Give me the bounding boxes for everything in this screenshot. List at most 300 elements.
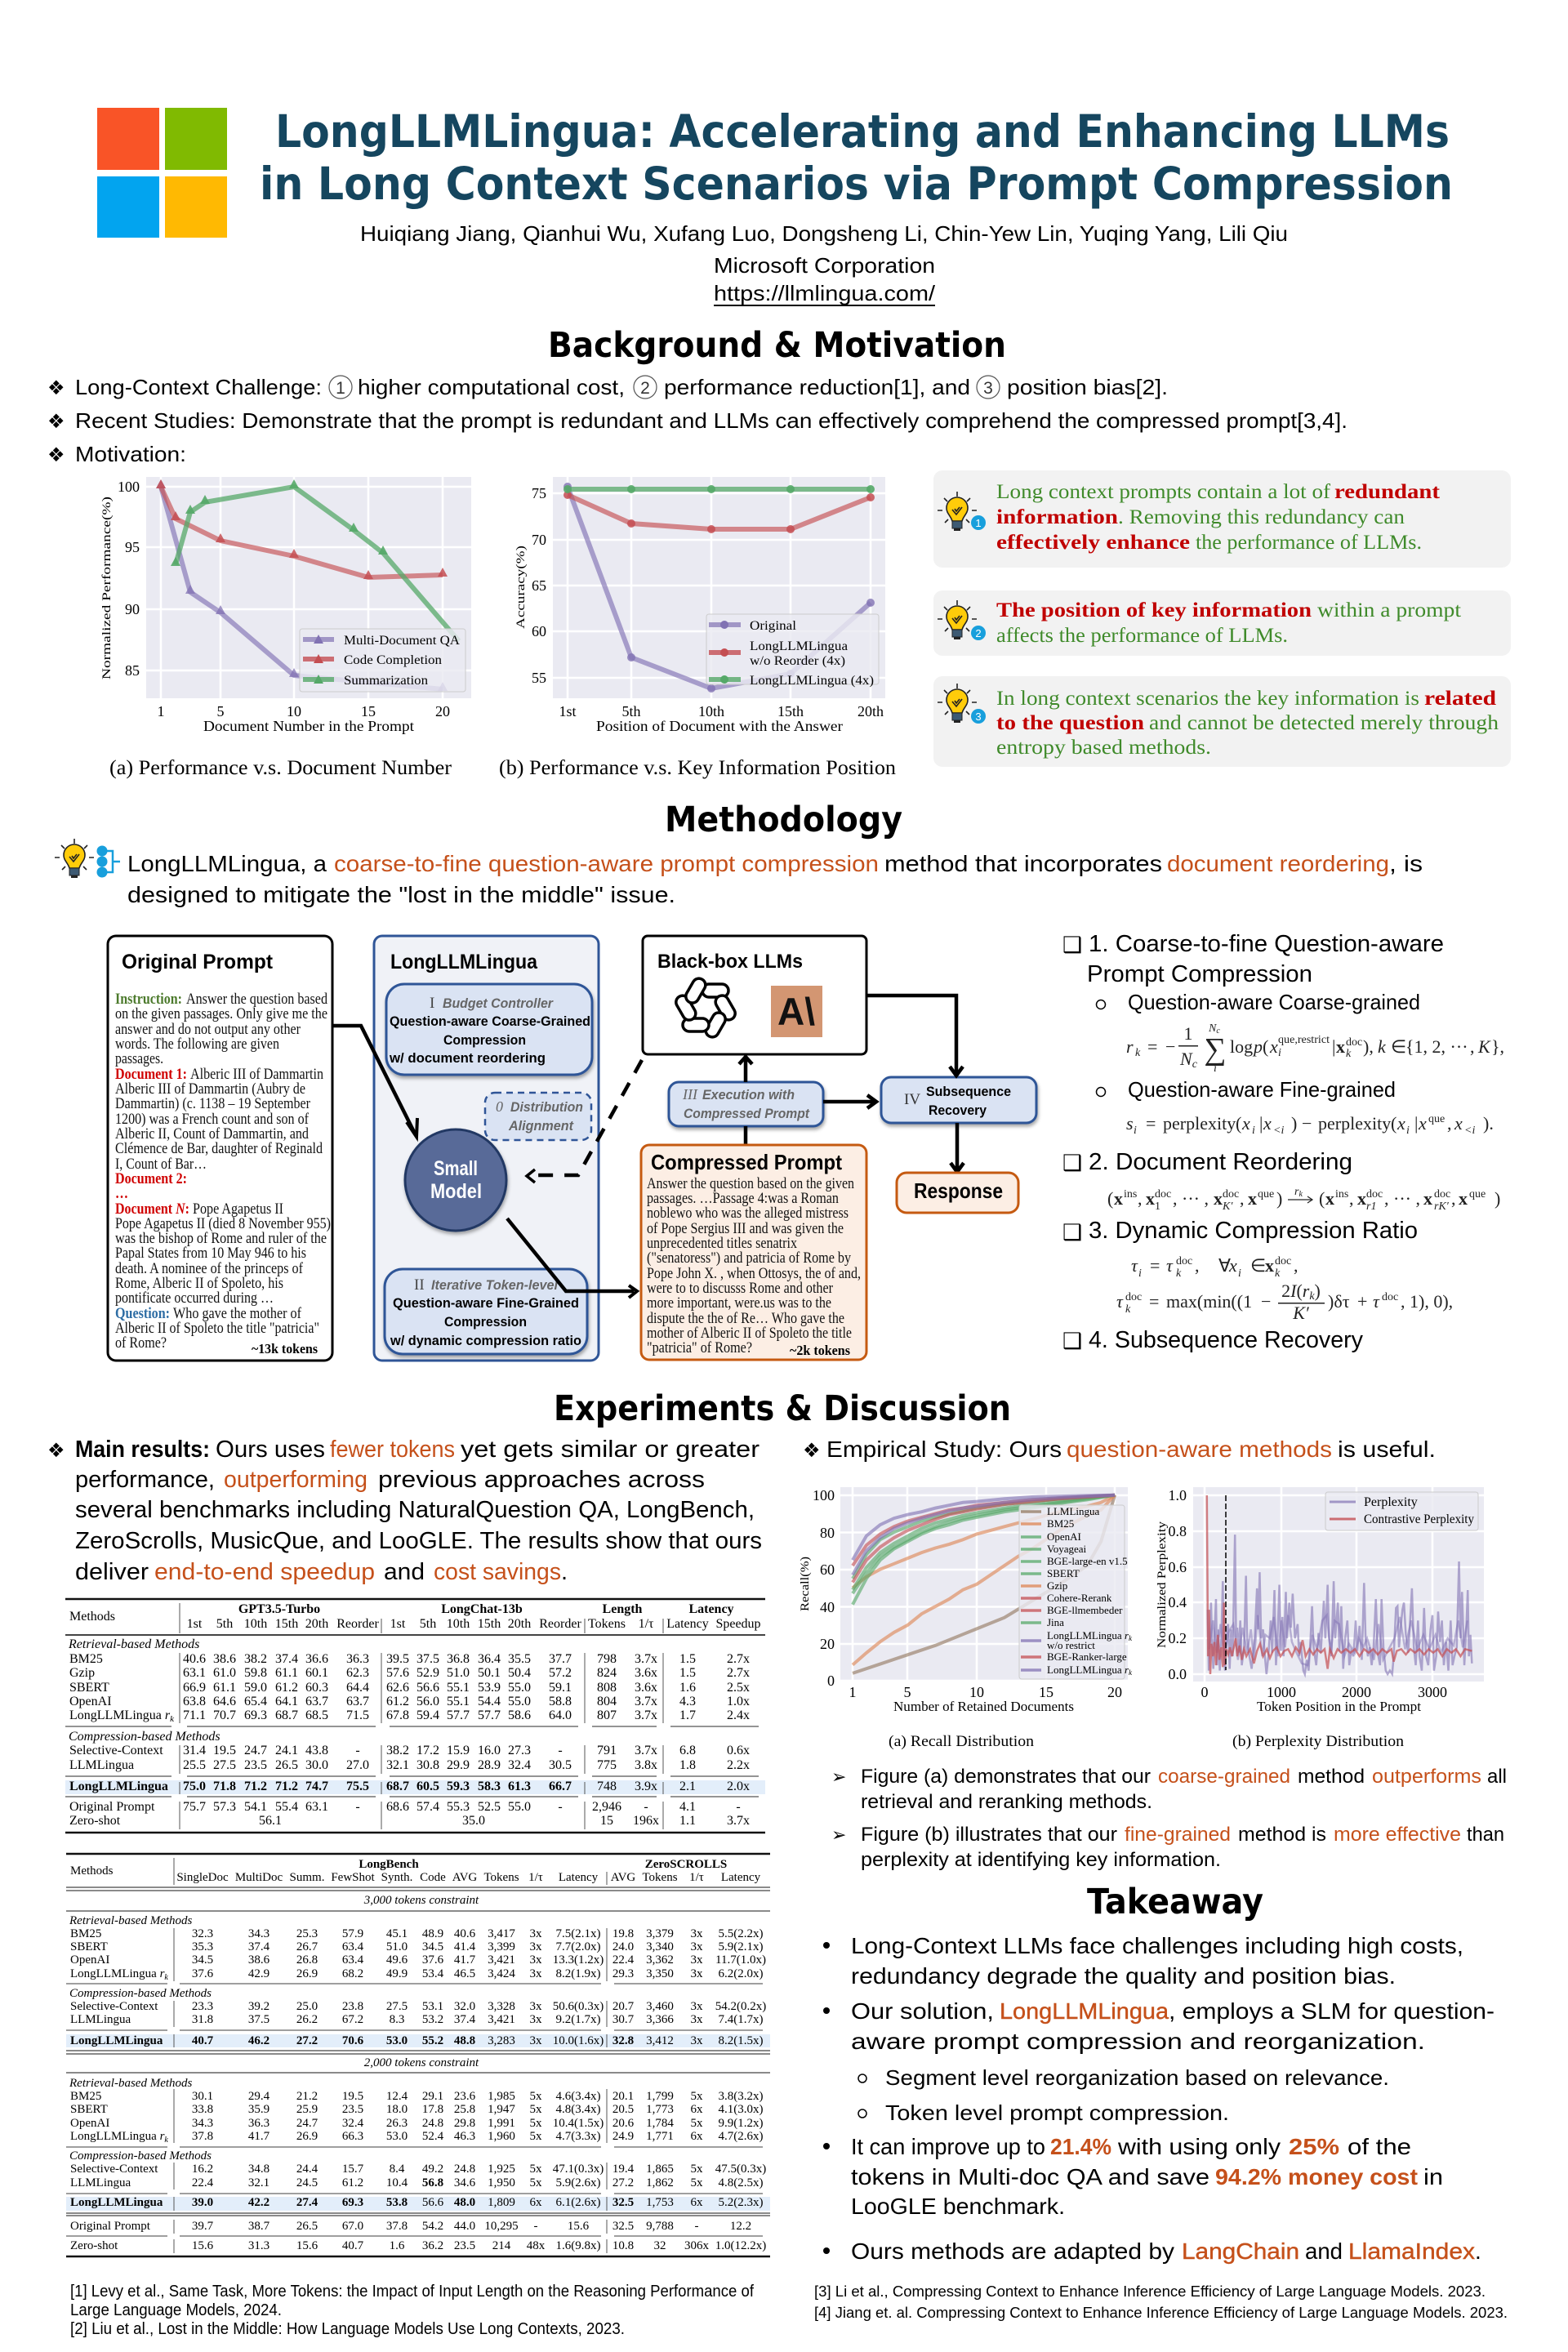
legend: recall methods: w/o restrict: [1047, 1639, 1095, 1651]
methodology intro text: method that incorporates: [884, 851, 1162, 876]
box: subsequence recovery: Subsequence: [926, 1084, 1011, 1099]
panel: original prompt: answer and do not output any other: [115, 1022, 301, 1038]
table: GPT3.5-Turbo and LongChat results: 5th: [216, 1617, 233, 1631]
table: GPT3.5-Turbo and LongChat results: 798: [597, 1652, 617, 1666]
table: GPT3.5-Turbo and LongChat results: 1.6: [679, 1681, 696, 1695]
table: LongBench and ZeroSCROLLS results: 63.4: [342, 1953, 364, 1967]
table: GPT3.5-Turbo and LongChat results: 59.8: [244, 1666, 267, 1680]
box: iterative token-level: [385, 1269, 587, 1354]
table: LongBench and ZeroSCROLLS results: 45.1: [386, 1927, 408, 1940]
formula: fine-grained: s: [1126, 1113, 1134, 1134]
formula: coarse-grained: 1: [1184, 1023, 1192, 1044]
methodology intro text: LongLLMLingua, a: [127, 851, 327, 876]
chart captions: (a) Performance v.s. Document Number: [109, 757, 452, 779]
chart: recall distribution: 80: [820, 1525, 835, 1541]
table: GPT3.5-Turbo and LongChat results: 3.7x: [635, 1695, 657, 1708]
table: LongBench and ZeroSCROLLS results: 46.5: [454, 1967, 475, 1980]
table: GPT3.5-Turbo and LongChat results: 37.4: [275, 1652, 298, 1666]
main results paragraph: Ours uses: [216, 1437, 325, 1463]
table: LongBench and ZeroSCROLLS results: 22.4: [612, 1953, 635, 1967]
table: LongBench and ZeroSCROLLS results: 5x: [529, 2103, 542, 2116]
chart: performance vs key information position: 5th: [621, 703, 641, 719]
table: LongBench and ZeroSCROLLS results: LongLLMLingua: [70, 2196, 163, 2209]
formula: document reordering: 1: [1155, 1200, 1160, 1213]
formula: coarse-grained: i: [1214, 1062, 1217, 1075]
table: GPT3.5-Turbo and LongChat results: 35.0: [462, 1814, 485, 1828]
panel: original prompt: Who gave the mother of: [173, 1306, 302, 1322]
panel: compressed prompt: were to to discusss Rome and other: [647, 1281, 833, 1297]
table: GPT3.5-Turbo and LongChat results: 3.7x: [635, 1652, 657, 1666]
table: LongBench and ZeroSCROLLS results: 3,000 tokens constraint: [363, 1894, 479, 1907]
table: GPT3.5-Turbo and LongChat results: 2.7x: [727, 1652, 750, 1666]
table: LongBench and ZeroSCROLLS results: 68.2: [342, 1967, 363, 1980]
table: LongBench and ZeroSCROLLS results: 26.9: [296, 2130, 318, 2143]
table: LongBench and ZeroSCROLLS results: 8.2(1.5x): [719, 2034, 763, 2047]
table: LongBench and ZeroSCROLLS results: BM25: [70, 1927, 101, 1940]
chart: performance vs document number: 5: [217, 703, 224, 719]
table: LongBench and ZeroSCROLLS results: 37.6: [422, 1953, 444, 1967]
callout: position of key information: The position of key information: [996, 599, 1312, 621]
formula: dynamic compression ratio: ∀: [1218, 1255, 1231, 1276]
chart: performance vs document number: Code Completion: [344, 653, 442, 667]
table: LongBench and ZeroSCROLLS results: 3,328: [488, 2000, 515, 2013]
figure findings: outperforms: [1372, 1766, 1481, 1788]
table: GPT3.5-Turbo and LongChat results: 15: [600, 1814, 613, 1828]
chart: perplexity distribution: 0.4: [1168, 1594, 1187, 1610]
table: LongBench and ZeroSCROLLS results: 70.6: [342, 2034, 364, 2047]
panel: compressed prompt: dispute the the of Re… Who gave the: [647, 1311, 844, 1327]
panel: original prompt: words. The following are given: [115, 1036, 279, 1053]
table: GPT3.5-Turbo and LongChat results: 10th: [244, 1617, 267, 1631]
table: LongBench and ZeroSCROLLS results: 26.5: [296, 2220, 318, 2233]
panel: original prompt: …: [115, 1186, 128, 1202]
empirical study heading text: Empirical Study: Ours: [826, 1437, 1062, 1462]
table: LongBench and ZeroSCROLLS results: 33.8: [192, 2103, 213, 2116]
table: LongBench and ZeroSCROLLS results: 9.9(1.2x): [719, 2117, 763, 2130]
icon: Anthropic logo: [771, 986, 822, 1037]
table: GPT3.5-Turbo and LongChat results: 71.2: [244, 1780, 267, 1793]
box: execution with compressed prompt: III: [682, 1086, 698, 1102]
panel: LongLLMLingua: LongLLMLingua: [390, 951, 538, 973]
table: LongBench and ZeroSCROLLS results: 53.1: [422, 2000, 443, 2013]
table: GPT3.5-Turbo and LongChat results: 3.6x: [635, 1666, 657, 1680]
panel: original prompt: [108, 936, 332, 1361]
formula: fine-grained: i: [1252, 1125, 1255, 1137]
table: LongBench and ZeroSCROLLS results: 32: [653, 2239, 666, 2252]
chart captions: (b) Performance v.s. Key Information Position: [499, 757, 897, 779]
table: LongBench and ZeroSCROLLS results: 6x: [529, 2196, 542, 2209]
table: LongBench and ZeroSCROLLS results: OpenAI: [70, 2117, 109, 2130]
table: GPT3.5-Turbo and LongChat results: 55.1: [447, 1681, 470, 1695]
figure findings: ➢: [831, 1767, 846, 1788]
table: LongBench and ZeroSCROLLS results: 13.3(1.2x): [553, 1953, 604, 1967]
table: LongBench and ZeroSCROLLS results: 3,283: [488, 2034, 515, 2047]
chart: performance vs document number: 90: [125, 601, 140, 617]
table: LongBench and ZeroSCROLLS results: 37.4: [454, 2013, 476, 2026]
main results paragraph: performance,: [75, 1467, 215, 1493]
small model circle: [405, 1129, 506, 1231]
table: LongBench and ZeroSCROLLS results: 23.3: [192, 2000, 213, 2013]
table: LongBench and ZeroSCROLLS results: 53.4: [422, 1967, 444, 1980]
table: LongBench and ZeroSCROLLS results: 10.0(1.6x): [553, 2034, 604, 2047]
legend: perplexity: Perplexity: [1364, 1495, 1418, 1509]
table: LongBench and ZeroSCROLLS results: 7.7(2.0x): [555, 1940, 601, 1953]
table: LongBench and ZeroSCROLLS results: 31.3: [248, 2239, 270, 2252]
table: GPT3.5-Turbo and LongChat results: 59.1: [549, 1681, 572, 1695]
table: LongBench and ZeroSCROLLS results: 29.3: [612, 1967, 634, 1980]
table: LongBench and ZeroSCROLLS results: 37.8: [386, 2220, 408, 2233]
chart: recall distribution: 20: [820, 1636, 835, 1652]
formula: document reordering: x: [1248, 1188, 1257, 1209]
table: LongBench and ZeroSCROLLS results: 46.2: [248, 2034, 270, 2047]
table: GPT3.5-Turbo and LongChat results: 1st: [187, 1617, 203, 1631]
methodology steps: Question-aware Fine-grained: [1128, 1077, 1396, 1102]
formula: document reordering: ,: [1240, 1188, 1245, 1209]
chart: perplexity distribution: 0.0: [1168, 1666, 1187, 1682]
main results paragraph: fewer tokens: [330, 1437, 455, 1463]
table: LongBench and ZeroSCROLLS results: 1,771: [646, 2130, 674, 2143]
table: GPT3.5-Turbo and LongChat results: 24.7: [244, 1744, 267, 1757]
table: GPT3.5-Turbo and LongChat results: 19.5: [213, 1744, 236, 1757]
table: LongBench and ZeroSCROLLS results: 1,862: [646, 2176, 674, 2189]
formula: document reordering: , ··· ,: [1173, 1188, 1209, 1209]
table: GPT3.5-Turbo and LongChat results: 64.4: [346, 1681, 369, 1695]
box: iterative token-level: II: [414, 1276, 425, 1294]
table: LongBench and ZeroSCROLLS results: 9,788: [646, 2220, 674, 2233]
table: LongBench and ZeroSCROLLS results: 5x: [529, 2163, 542, 2176]
panel: black-box LLMs: [643, 936, 866, 1054]
box: subsequence recovery: [881, 1077, 1036, 1123]
table: GPT3.5-Turbo and LongChat results: 57.3: [213, 1800, 236, 1814]
table: LongBench and ZeroSCROLLS results: 34.5: [422, 1940, 443, 1953]
methodology steps: 3. Dynamic Compression Ratio: [1089, 1218, 1418, 1244]
table: GPT3.5-Turbo and LongChat results: 53.9: [478, 1681, 501, 1695]
formula: fine-grained: (: [1391, 1113, 1396, 1134]
arrow: original prompt to small model: [332, 1026, 417, 1137]
table: GPT3.5-Turbo and LongChat results: 71.8: [213, 1780, 236, 1793]
table: LongBench and ZeroSCROLLS results: LongLLMLingua: [70, 2034, 163, 2047]
table: LongBench and ZeroSCROLLS results: 25.0: [296, 2000, 318, 2013]
table: LongBench and ZeroSCROLLS results: 32.5: [612, 2196, 634, 2209]
table: LongBench and ZeroSCROLLS results: 6.1(2.6x): [555, 2196, 601, 2209]
table: LongBench and ZeroSCROLLS results: 306x: [684, 2239, 709, 2252]
table: LongBench and ZeroSCROLLS results: 3x: [529, 1927, 542, 1940]
table: GPT3.5-Turbo and LongChat results: 37.7: [549, 1652, 572, 1666]
table: LongBench and ZeroSCROLLS results: Retrieval-based Methods: [69, 1914, 193, 1927]
callout: position of key information: 2: [975, 627, 982, 639]
table: GPT3.5-Turbo and LongChat results: 5th: [420, 1617, 436, 1631]
chart captions: [109, 757, 897, 779]
table: LongBench and ZeroSCROLLS results: 38.7: [248, 2220, 270, 2233]
references right: [4] Jiang et. al. Compressing Context to Enhance Inference Efficiency of Large Language Models. 2023.: [814, 2305, 1508, 2321]
table: LongBench and ZeroSCROLLS results: 5.9(2.6x): [555, 2176, 601, 2189]
table: LongBench and ZeroSCROLLS results: 1,865: [646, 2163, 674, 2176]
panel: compressed prompt: [641, 1145, 866, 1360]
takeaway bullets: tokens in Multi-doc QA and save: [851, 2164, 1209, 2189]
table: GPT3.5-Turbo and LongChat results: 38.2: [244, 1652, 267, 1666]
table: GPT3.5-Turbo and LongChat results: Latency: [666, 1617, 709, 1631]
references left: [1] Levy et al., Same Task, More Tokens: the Impact of Input Length on the Reasoning Performance of: [70, 2283, 754, 2301]
authors and affiliation: https://llmlingua.com/: [714, 281, 936, 305]
formula: dynamic compression ratio: x: [1228, 1255, 1237, 1276]
table: LongBench and ZeroSCROLLS results: 38.6: [248, 1953, 270, 1967]
table: LongBench and ZeroSCROLLS results: 3,362: [646, 1953, 674, 1967]
formula: dynamic compression ratio: 2I(r: [1281, 1281, 1309, 1301]
table: LongBench and ZeroSCROLLS results: 27.2: [296, 2034, 318, 2047]
table: GPT3.5-Turbo and LongChat results: 1.5: [679, 1652, 696, 1666]
table: LongBench and ZeroSCROLLS results: 32.5: [612, 2220, 634, 2233]
formula: dynamic compression ratio: ,: [1294, 1255, 1298, 1276]
table: LongBench and ZeroSCROLLS results: 4.8(2.5x): [719, 2176, 763, 2189]
table: LongBench and ZeroSCROLLS results: 24.5: [296, 2176, 318, 2189]
methodology intro text: [127, 851, 1423, 907]
table: LongBench and ZeroSCROLLS results: LongLLMLingua r: [70, 2130, 164, 2143]
table: GPT3.5-Turbo and LongChat results: 68.7: [386, 1780, 409, 1793]
box: subsequence recovery: Recovery: [929, 1102, 987, 1118]
chart: performance vs key information position: 10th: [698, 703, 724, 719]
table: LongBench and ZeroSCROLLS results: 3,460: [646, 2000, 674, 2013]
background bullets: Motivation:: [75, 442, 186, 466]
formula: document reordering: ): [1494, 1188, 1500, 1209]
chart captions: recall and perplexity: (b) Perplexity Distribution: [1232, 1733, 1405, 1750]
small model circle: Small: [434, 1157, 478, 1180]
callout: redundant information: the performance of LLMs.: [1196, 532, 1422, 554]
legend: recall methods: BM25: [1047, 1517, 1074, 1530]
table: LongBench and ZeroSCROLLS results: 6x: [691, 2196, 703, 2209]
table: GPT3.5-Turbo and LongChat results: Methods: [69, 1610, 115, 1624]
table: LongBench and ZeroSCROLLS results: 7.5(2.1x): [555, 1927, 601, 1940]
table: GPT3.5-Turbo and LongChat results: Reorder: [336, 1617, 379, 1631]
formula: dynamic compression ratio: −: [1261, 1291, 1271, 1312]
table: GPT3.5-Turbo and LongChat results: 64.1: [275, 1695, 298, 1708]
background bullets: higher computational cost,: [358, 375, 625, 399]
formula: dynamic compression ratio: ): [1315, 1281, 1321, 1301]
table: GPT3.5-Turbo and LongChat results: 59.0: [244, 1681, 267, 1695]
formula: dynamic compression ratio: doc: [1275, 1255, 1291, 1267]
formula: dynamic compression ratio: ∈: [1250, 1255, 1266, 1276]
table: LongBench and ZeroSCROLLS results: 34.8: [248, 2163, 270, 2176]
main results paragraph: .: [561, 1559, 568, 1585]
formula: document reordering: x: [1325, 1188, 1334, 1209]
formula: dynamic compression ratio: τ: [1166, 1255, 1174, 1276]
box: iterative token-level: w/ dynamic compression ratio: [390, 1333, 581, 1348]
formula: document reordering: r1: [1366, 1200, 1376, 1213]
table: LongBench and ZeroSCROLLS results: 53.0: [386, 2130, 408, 2143]
table: LongBench and ZeroSCROLLS results: 1,991: [488, 2117, 515, 2130]
table: GPT3.5-Turbo and LongChat results: 38.6: [213, 1652, 236, 1666]
table: GPT3.5-Turbo and LongChat results: 55.1: [447, 1695, 470, 1708]
takeaway bullets: redundancy degrade the quality and position bias.: [851, 1963, 1396, 1989]
takeaway bullets: LongLLMLingua: [1000, 1998, 1169, 2024]
table: LongBench and ZeroSCROLLS results: LongBench: [359, 1858, 419, 1871]
table: LongBench and ZeroSCROLLS results: 42.9: [248, 1967, 270, 1980]
formula: document reordering: x: [1357, 1188, 1366, 1209]
table: LongBench and ZeroSCROLLS results: 27.5: [386, 2000, 408, 2013]
table: LongBench and ZeroSCROLLS results: LLMLingua: [70, 2176, 131, 2189]
chart: performance vs document number: Multi-Document QA: [344, 634, 460, 648]
table: LongBench and ZeroSCROLLS results: 32.0: [454, 2000, 475, 2013]
formula: document reordering: x: [1423, 1188, 1432, 1209]
table: GPT3.5-Turbo and LongChat results: 24.1: [275, 1744, 298, 1757]
references right: [814, 2283, 1508, 2321]
table: LongBench and ZeroSCROLLS results: 6x: [691, 2130, 703, 2143]
table: LongBench and ZeroSCROLLS results: 5x: [691, 2117, 703, 2130]
table: LongBench and ZeroSCROLLS results: 17.8: [422, 2103, 443, 2116]
formula: document reordering: que: [1258, 1188, 1274, 1200]
table: LongBench and ZeroSCROLLS results: 4.1(3.0x): [719, 2103, 763, 2116]
formula: dynamic compression ratio: doc: [1382, 1291, 1398, 1303]
methodology steps: 1. Coarse-to-fine Question-aware: [1089, 931, 1444, 957]
formula: dynamic compression ratio: τ: [1373, 1291, 1380, 1312]
chart captions: recall and perplexity: [889, 1733, 1405, 1750]
background bullets: ❖: [47, 410, 65, 433]
main results paragraph: [47, 1437, 762, 1585]
formula: coarse-grained: r: [1126, 1036, 1134, 1057]
callout: position of key information: within a prompt: [1317, 599, 1461, 621]
table: GPT3.5-Turbo and LongChat results: 1/τ: [639, 1617, 654, 1631]
figure findings: more effective: [1334, 1824, 1461, 1846]
table: LongBench and ZeroSCROLLS results: 63.4: [342, 1940, 364, 1953]
table: LongBench and ZeroSCROLLS results: 37.4: [248, 1940, 270, 1953]
methodology steps: ❑: [1062, 1151, 1082, 1176]
takeaway bullets: 25%: [1289, 2134, 1339, 2159]
table: LongBench and ZeroSCROLLS results: Zero-shot: [70, 2239, 118, 2252]
chart: performance vs document number: 15: [361, 703, 376, 719]
table: LongBench and ZeroSCROLLS results: 4.7(3.3x): [555, 2130, 601, 2143]
takeaway bullets: and: [1305, 2238, 1343, 2264]
formula: fine-grained: =: [1146, 1113, 1156, 1134]
table: LongBench and ZeroSCROLLS results: 44.0: [454, 2220, 475, 2233]
takeaway bullets: 21.4%: [1050, 2134, 1111, 2159]
panel: original prompt: Document 1:: [115, 1067, 187, 1083]
methodology steps: ❑: [1062, 933, 1082, 958]
table: GPT3.5-Turbo and LongChat results: 16.0: [478, 1744, 501, 1757]
arrow: small model to compressed prompt: [507, 1218, 637, 1298]
table: GPT3.5-Turbo and LongChat results: 68.5: [305, 1708, 328, 1722]
table: GPT3.5-Turbo and LongChat results: 66.9: [183, 1681, 206, 1695]
table: LongBench and ZeroSCROLLS results: 5.2(2.3x): [719, 2196, 763, 2209]
panel: original prompt: I, Count of Bar…: [115, 1156, 207, 1173]
heading: Experiments & Discussion: Experiments & Discussion: [554, 1388, 1011, 1429]
table: LongBench and ZeroSCROLLS results: 54.2(0.2x): [715, 2000, 766, 2013]
table: LongBench and ZeroSCROLLS results: Synth.: [381, 1871, 412, 1884]
table: GPT3.5-Turbo and LongChat results: 28.9: [478, 1758, 501, 1772]
table: LongBench and ZeroSCROLLS results: 3x: [529, 2034, 542, 2047]
table: LongBench and ZeroSCROLLS results: 32.3: [192, 1927, 213, 1940]
table: LongBench and ZeroSCROLLS results: 1,950: [488, 2176, 515, 2189]
table: GPT3.5-Turbo and LongChat results: 62.6: [386, 1681, 409, 1695]
table: LongBench and ZeroSCROLLS results: 24.4: [296, 2163, 318, 2176]
table: LongBench and ZeroSCROLLS results: 3x: [691, 1967, 703, 1980]
table: GPT3.5-Turbo and LongChat results: Original Prompt: [69, 1800, 155, 1814]
table: GPT3.5-Turbo and LongChat results: 20th: [508, 1617, 531, 1631]
table: LongBench and ZeroSCROLLS results: 61.2: [342, 2176, 363, 2189]
table: LongBench and ZeroSCROLLS results: 3x: [691, 2034, 703, 2047]
panel: original prompt: ~13k tokens: [252, 1341, 318, 1356]
table: GPT3.5-Turbo and LongChat results: 55.0: [508, 1681, 531, 1695]
table: LongBench and ZeroSCROLLS results: 3,421: [488, 1953, 515, 1967]
table: GPT3.5-Turbo and LongChat results: 35.5: [508, 1652, 531, 1666]
chart: perplexity distribution: [1156, 1487, 1484, 1714]
chart: perplexity distribution: 2000: [1342, 1684, 1371, 1700]
table: GPT3.5-Turbo and LongChat results: 60.3: [305, 1681, 328, 1695]
table: GPT3.5-Turbo and LongChat results: 3.9x: [635, 1780, 657, 1793]
table: LongBench and ZeroSCROLLS results: 24.0: [612, 1940, 634, 1953]
formula: fine-grained: que: [1428, 1113, 1445, 1125]
panel: original prompt: death. A nominee of the princeps of: [115, 1261, 304, 1277]
references right: [3] Li et al., Compressing Context to Enhance Inference Efficiency of Large Language Models. 2023.: [814, 2283, 1486, 2300]
table: LongBench and ZeroSCROLLS results: 20.5: [612, 2103, 634, 2116]
formula: document reordering: rK′: [1434, 1200, 1450, 1213]
table: LongBench and ZeroSCROLLS results: SingleDoc: [176, 1871, 229, 1884]
table: LongBench and ZeroSCROLLS results: 57.9: [342, 1927, 363, 1940]
panel: original prompt: Original Prompt: [122, 951, 274, 973]
panel: original prompt: Document 2:: [115, 1171, 187, 1187]
table: LongBench and ZeroSCROLLS results: 3x: [529, 1953, 542, 1967]
table: LongBench and ZeroSCROLLS results: 5.9(2.1x): [719, 1940, 763, 1953]
formula: coarse-grained: },: [1491, 1036, 1504, 1057]
table: LongBench and ZeroSCROLLS results: 51.0: [386, 1940, 408, 1953]
table: LongBench and ZeroSCROLLS results: 37.5: [248, 2013, 270, 2026]
table: LongBench and ZeroSCROLLS results: 67.2: [342, 2013, 363, 2026]
table: LongBench and ZeroSCROLLS results: 10,295: [484, 2220, 519, 2233]
table: LongBench and ZeroSCROLLS results: [66, 1854, 770, 2256]
table: GPT3.5-Turbo and LongChat results: 3.7x: [635, 1744, 657, 1757]
table: LongBench and ZeroSCROLLS results: BM25: [70, 2090, 101, 2103]
methodology steps: ❑: [1062, 1220, 1082, 1245]
formula: coarse-grained: doc: [1346, 1036, 1362, 1049]
table: GPT3.5-Turbo and LongChat results: 27.5: [213, 1758, 236, 1772]
table: LongBench and ZeroSCROLLS results: 10.4(1.5x): [553, 2117, 604, 2130]
table: GPT3.5-Turbo and LongChat results: 55.4: [275, 1800, 298, 1814]
table: LongBench and ZeroSCROLLS results: 3,399: [488, 1940, 515, 1953]
formula: fine-grained: <i: [1273, 1125, 1284, 1137]
table: LongBench and ZeroSCROLLS results: 6x: [691, 2103, 703, 2116]
formula: dynamic compression ratio: max(min((1: [1166, 1291, 1252, 1312]
table: LongBench and ZeroSCROLLS results: 15.7: [342, 2163, 364, 2176]
formula: document reordering: ins: [1124, 1188, 1137, 1200]
chart: performance vs key information position: Original: [750, 619, 797, 633]
table: GPT3.5-Turbo and LongChat results: 58.6: [508, 1708, 531, 1722]
panel: LongLLMLingua: [374, 936, 599, 1361]
table: LongBench and ZeroSCROLLS results: 29.4: [248, 2090, 270, 2103]
table: LongBench and ZeroSCROLLS results: -: [534, 2220, 537, 2233]
figure findings: Figure (b) illustrates that our: [861, 1824, 1117, 1846]
panel: compressed prompt: "patricia" of Rome?: [647, 1340, 752, 1356]
figure findings: perplexity at identifying key information.: [861, 1849, 1221, 1871]
table: LongBench and ZeroSCROLLS results: 11.7(1.0x): [715, 1953, 766, 1967]
table: GPT3.5-Turbo and LongChat results: 6.8: [679, 1744, 696, 1757]
heading: Takeaway: Takeaway: [1087, 1882, 1263, 1922]
chart: performance vs key information position: 55: [532, 670, 546, 686]
table: LongBench and ZeroSCROLLS results: 48.8: [454, 2034, 475, 2047]
formula: dynamic compression ratio: =: [1150, 1255, 1160, 1276]
methodology intro text: , is: [1389, 851, 1423, 876]
table: LongBench and ZeroSCROLLS results: 20.1: [612, 2090, 634, 2103]
table: GPT3.5-Turbo and LongChat results: 17.2: [416, 1744, 439, 1757]
table: LongBench and ZeroSCROLLS results: 2,000 tokens constraint: [364, 2056, 479, 2069]
chart: performance vs document number: 85: [125, 662, 140, 679]
table: LongBench and ZeroSCROLLS results: 53.2: [422, 2013, 443, 2026]
takeaway bullets: Segment level reorganization based on relevance.: [885, 2065, 1389, 2090]
methodology steps: ❑: [1062, 1329, 1082, 1354]
chart: performance vs key information position: 20th: [858, 703, 884, 719]
chart: recall distribution: 0: [827, 1673, 835, 1689]
formula: document reordering: x: [1114, 1188, 1123, 1209]
legend: recall methods: Gzip: [1047, 1579, 1067, 1592]
formula: coarse-grained: c: [1192, 1058, 1198, 1071]
chart: performance vs document number: 100: [118, 479, 140, 495]
